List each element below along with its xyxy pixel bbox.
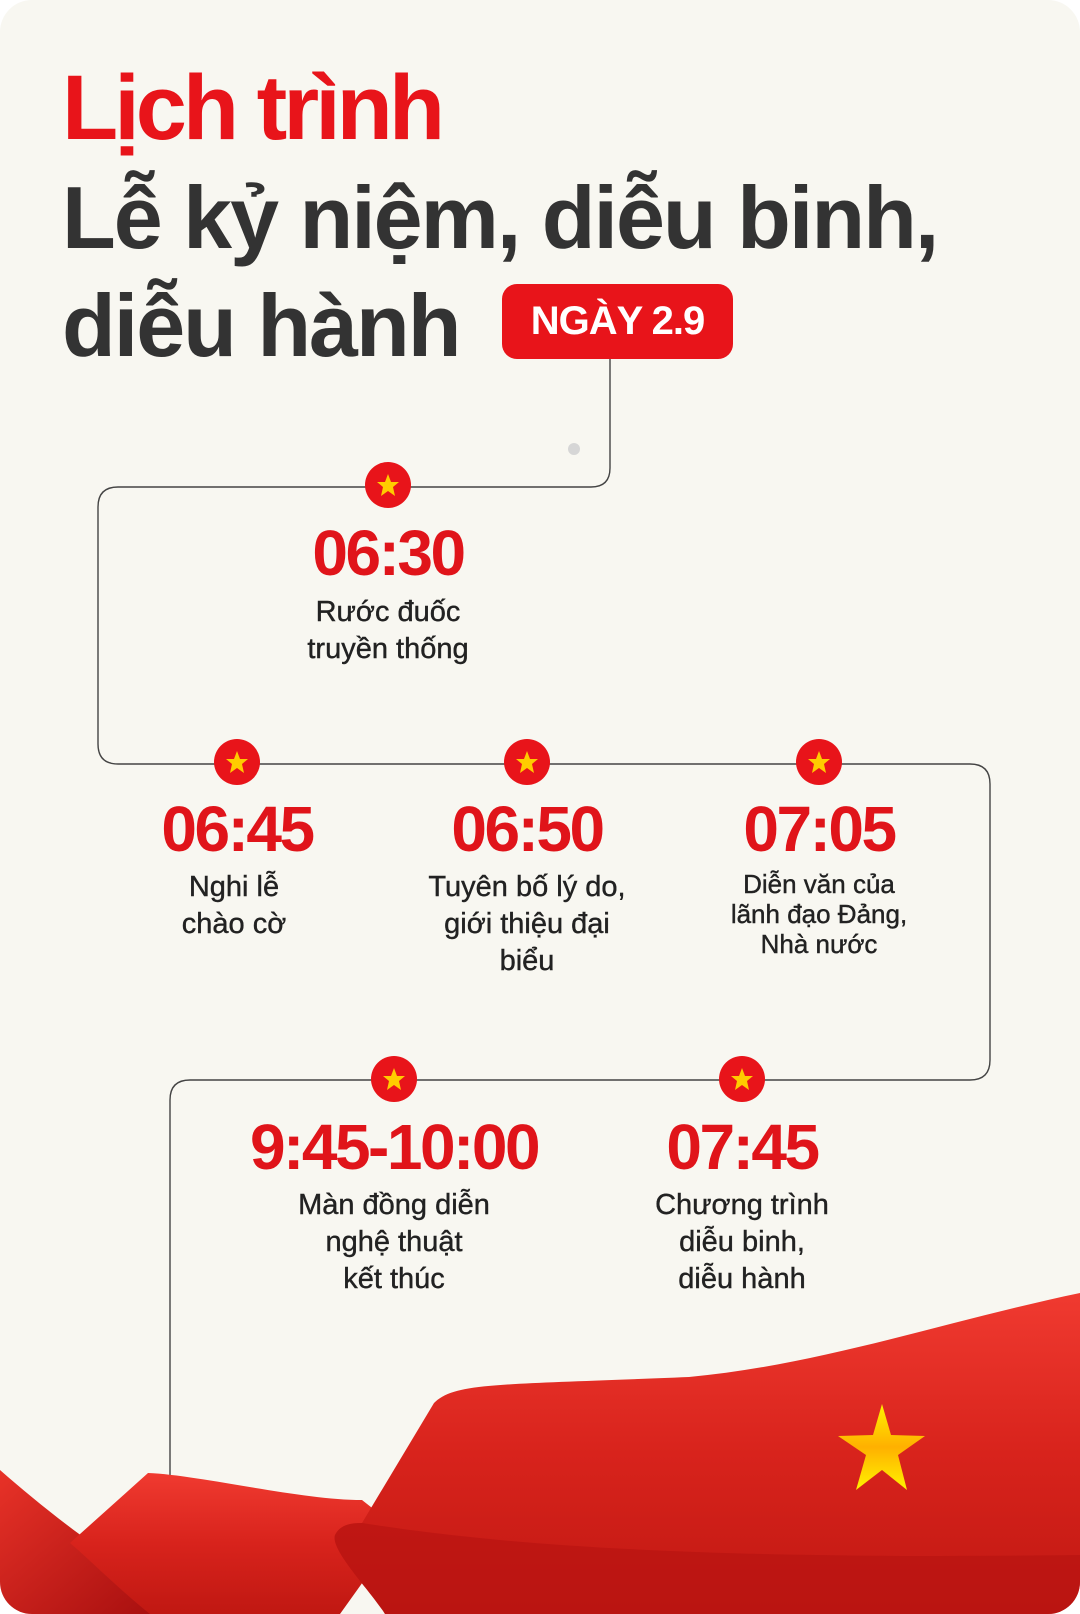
item: 06:30: truyền thống — [307, 633, 469, 665]
item: 9:45-10:00: 9:45-10:00 — [250, 1111, 538, 1183]
item: 06:30 — [307, 517, 469, 665]
item: 07:05 — [731, 793, 907, 959]
item: 9:45-10:00: Màn đồng diễn — [298, 1189, 490, 1221]
item: 07:05: lãnh đạo Đảng, — [731, 899, 907, 929]
item: 9:45-10:00: nghệ thuật — [325, 1226, 463, 1258]
item: 9:45-10:00 — [250, 1111, 538, 1295]
badge: date: NGÀY 2.9 — [531, 299, 704, 343]
item: 07:45: 07:45 — [666, 1111, 818, 1183]
item: 06:45: Nghi lễ — [189, 871, 279, 903]
item: 06:50: giới thiệu đại — [444, 908, 610, 940]
item: 07:45 — [655, 1111, 829, 1295]
title — [62, 57, 937, 375]
item: 06:50 — [428, 793, 626, 977]
item: 06:45: 06:45 — [161, 793, 313, 865]
title: diễu hành — [62, 276, 460, 375]
title: Lịch trình — [62, 57, 441, 159]
icon: flag star — [838, 1404, 925, 1490]
item: 06:45: chào cờ — [182, 908, 286, 940]
item: 06:30: 06:30 — [312, 517, 464, 589]
item: 9:45-10:00: kết thúc — [343, 1263, 445, 1295]
item: 07:05: 07:05 — [743, 793, 895, 865]
item: 07:45: diễu hành — [678, 1263, 806, 1295]
title: Lễ kỷ niệm, diễu binh, — [62, 168, 937, 267]
item: 06:50: 06:50 — [451, 793, 603, 865]
item: 06:50: biểu — [500, 945, 554, 977]
item: 06:45 — [161, 793, 314, 940]
item: 06:30: Rước đuốc — [316, 596, 460, 628]
item: 06:50: Tuyên bố lý do, — [428, 871, 626, 903]
item: 07:45: diễu binh, — [679, 1226, 805, 1258]
item: 07:45: Chương trình — [655, 1189, 829, 1221]
flag ribbon — [0, 1293, 1080, 1614]
item: 07:05: Diễn văn của — [743, 869, 895, 899]
item: 07:05: Nhà nước — [761, 929, 877, 959]
badge: date — [502, 284, 733, 359]
